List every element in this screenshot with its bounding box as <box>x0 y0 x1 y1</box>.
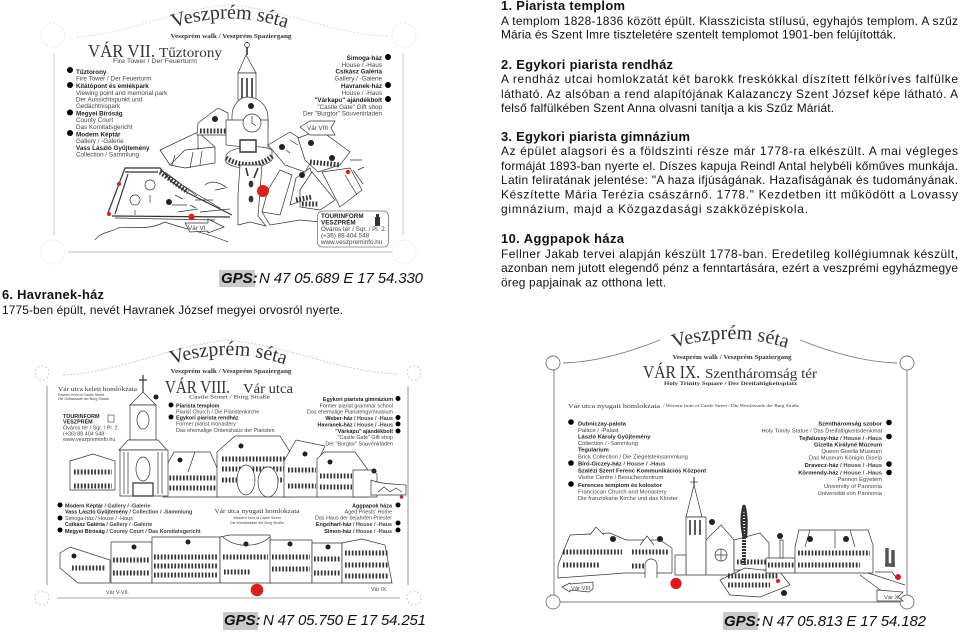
legend left: Visitor Centre / Besucherzentrum <box>578 475 663 481</box>
text block: 3. Egykori piarista gimnázium: Az épület alagsori és a földszinti része már 1778-ra elkészült. A mai végleges <box>501 144 958 158</box>
facade caption west <box>214 509 300 525</box>
GPS label map IX: GPS: <box>724 613 761 630</box>
legend left: County Court <box>76 117 113 124</box>
legend top right: "Castle Gate" Gift shop <box>338 435 393 441</box>
facade caption <box>568 403 799 410</box>
legend right <box>303 54 391 118</box>
facade caption: / Western front of Castle Street / Die Westfassade der Burg Straße <box>663 404 799 408</box>
legend left: Kilátópont és emlékpark <box>76 83 149 90</box>
legend bottom left: Megyei Bíróság / County Court / Das Komitatsgericht <box>65 529 201 535</box>
facade caption west: Die Westfassade der Burg Straße <box>230 521 284 525</box>
map subtitle: Veszprém walk / Veszprém Spaziergang <box>672 355 792 361</box>
text block: 3. Egykori piarista gimnázium <box>501 129 958 216</box>
Tourinform box <box>62 414 119 443</box>
facade caption east: Die Ostfassade der Burg Straße <box>58 397 109 401</box>
illustration: lower street row <box>60 535 392 583</box>
GPS label map IX: N 47 05.813 E 17 54.182 <box>762 613 927 630</box>
facade caption: Vár utca nyugati homlokzata <box>568 403 660 410</box>
legend right: Holy Trinity Statue / Das Dreifaltigkeitsdenkmal <box>762 428 882 434</box>
legend right: Csikász Galéria <box>335 68 382 76</box>
legend right: Gizella Királyné Múzeum <box>814 442 882 448</box>
text block: 10. Aggpapok háza <box>501 231 958 290</box>
legend top centre: Piarist Church / Die Piaristenkirche <box>176 410 259 416</box>
legend top right: Former piarist grammar school <box>320 404 393 410</box>
legend top centre: Former piarist monastery <box>176 422 236 428</box>
illustration: buildings right of tower <box>262 130 364 225</box>
GPS label map VIII: N 47 05.750 E 17 54.251 <box>263 612 426 629</box>
text block: 2. Egykori piarista rendház <box>501 57 958 115</box>
text block: 3. Egykori piarista gimnázium: 3. Egykori piarista gimnázium <box>501 129 690 144</box>
legend top right: Weber-ház / House / -Haus <box>325 416 393 422</box>
Tourinform box: www.veszpreminfo.hu <box>62 437 115 443</box>
text block: 6. Havranek-ház: 6. Havranek-ház <box>2 287 104 302</box>
Tourinform box: Óváros tér / Sqr. / Pl. 2. <box>321 224 387 233</box>
illustration: Holy Trinity statue <box>720 505 790 597</box>
map heading: Vár utca <box>243 381 293 396</box>
legend left <box>67 67 168 158</box>
legend left: Dubniczay-palota <box>578 422 627 428</box>
legend bottom right: Aged Priests' Home <box>345 510 392 516</box>
legend right <box>762 420 892 497</box>
map heading <box>165 376 293 397</box>
legend right: Havranek-ház <box>341 83 382 90</box>
legend right: Tejfalussy-ház / House / -Haus <box>799 436 882 442</box>
legend left: Brick Collection / Die Ziegelsteinsammlung <box>578 454 688 460</box>
map subtitle: Veszprém walk / Veszprém Spaziergang <box>170 34 292 40</box>
map title: Veszprém séta <box>168 341 286 364</box>
legend left: Fire Tower / Der Feuerturm <box>76 76 151 82</box>
illustration: Piarist church <box>119 375 168 496</box>
legend right: House / -Haus <box>342 90 382 97</box>
illustration: castle wall and garden <box>95 108 232 242</box>
map heading translation: Holy Trinity Square / Der Dreifaltigkeitsplatz <box>664 381 798 387</box>
Tourinform box: VESZPRÉM <box>63 418 93 426</box>
map markers <box>72 394 376 558</box>
arrow: Vár VI: Vár VI <box>188 225 206 232</box>
legend top right: Havranek-ház / House / -Haus <box>317 422 393 428</box>
legend right: Queen Gisella Museum <box>821 449 882 455</box>
text block: 1. Piarista templom: Mária és Szent Imre tiszteletére szentelt templomot 1901-ben felújították. <box>501 28 896 42</box>
legend right: Simoga-ház <box>347 55 382 62</box>
legend left: Szalézi Szent Ferenc Kommunikációs Központ <box>578 468 706 474</box>
legend bottom right <box>315 502 400 535</box>
text block: 1. Piarista templom <box>501 0 958 42</box>
legend bottom left <box>58 502 201 535</box>
facade caption west: Western front of Castle Street <box>233 516 281 520</box>
text block: 10. Aggpapok háza: 10. Aggpapok háza <box>501 231 625 246</box>
text block: 2. Egykori piarista rendház: felső falfülkében Szent Anna olvasni tanítja a kis Szűz Máriát. <box>501 101 834 115</box>
legend left: Gedächtnispark <box>76 103 121 110</box>
legend right: "Castle Gate" Gift shop <box>317 104 382 111</box>
map markers <box>166 103 335 205</box>
legend top right: Das ehemalige Piaristengymnasium <box>307 410 393 416</box>
text block: 6. Havranek-ház <box>2 287 343 317</box>
legend bottom right: Simon-ház / House / -Haus <box>324 529 392 535</box>
red location dots <box>251 495 403 596</box>
arrow: Vár VIII <box>300 121 335 135</box>
legend top centre: Egykori piarista rendház <box>176 416 239 422</box>
legend top right: Der "Burgtor" Souvenirladen <box>325 442 393 448</box>
map subtitle: Veszprém walk / Veszprém Spaziergang <box>170 369 292 375</box>
legend bottom right: Das Haus der bejahrten Priester <box>315 516 392 522</box>
legend left: Ferences templom és kolostor <box>578 483 663 489</box>
illustration: fire tower <box>226 42 272 226</box>
map heading <box>643 361 818 382</box>
Tourinform box: TOURINFORM <box>63 414 100 420</box>
legend right: Körmendy-ház / House / -Haus <box>798 470 882 476</box>
legend left: Der Aussichtspunkt und <box>76 96 143 104</box>
legend top right: Egykori piarista gimnázium <box>323 397 393 403</box>
arrow: Vár X: Vár X. <box>884 595 900 601</box>
map title: Veszprém séta <box>670 325 788 348</box>
map heading translation: Castle Street / Burg Straße <box>189 394 271 400</box>
legend right: Szentháromság szobor <box>818 422 883 428</box>
text block: 10. Aggpapok háza: öreg papjainak az otthona lett. <box>501 276 666 290</box>
legend top right: "Várkapu" ajándékbolt <box>335 429 393 435</box>
legend right: Das Museum Königin Gisela <box>809 456 883 462</box>
text block: 6. Havranek-ház: 1775-ben épült, nevét Havranek József megyei orvosról nyerte. <box>2 303 343 317</box>
text block: 3. Egykori piarista gimnázium: formáját 1893-ban nyerte el. Díszes kapuja Reindl Antal helybéli kőműves munkája. <box>501 159 958 173</box>
legend right: "Várkapu" ajándékbolt <box>314 97 383 104</box>
legend left: Franciscan Church and Monastery <box>578 490 667 496</box>
legend left: Das Komitatsgericht <box>76 124 133 131</box>
Tourinform box: (+36) 88 404 548 <box>321 232 370 240</box>
map heading: VÁR VII. <box>88 40 155 61</box>
map frame <box>41 5 416 264</box>
text block: 10. Aggpapok háza: azonban nem jutott elegendő pénz a fenntartására, ezért a veszprémi egyházmegye <box>501 261 958 275</box>
text block: 2. Egykori piarista rendház: 2. Egykori piarista rendház <box>501 57 673 72</box>
legend left: Collection / -Sammlung <box>578 441 638 447</box>
text block: 3. Egykori piarista gimnázium: Készítette Mária Terézia császárnő. 1778." Kezdetben itt működött a Lovassy <box>501 188 958 202</box>
legend bottom right: Engelhart-ház / House / -Haus <box>316 522 392 528</box>
legend bottom left: Vass László Gyűjtemény / Collection / -Sammlung <box>65 510 192 516</box>
street labels <box>106 587 387 596</box>
Tourinform box: Óváros tér / Sqr. / Pl. 2. <box>63 424 119 432</box>
facade caption west: Vár utca nyugati homlokzata <box>214 509 300 515</box>
legend right: Pannon Egyetem <box>838 477 882 483</box>
GPS label map VII: GPS: <box>221 270 258 287</box>
legend bottom left: Modern Képtár / Gallery / -Galerie <box>65 504 150 510</box>
street labels: Vár IX. <box>371 587 387 593</box>
red location dots <box>107 170 350 220</box>
facade caption east: Vár utca keleti homlokzata <box>58 387 137 393</box>
legend left: Tűztorony <box>76 69 107 76</box>
arrow: Vár VIII <box>562 582 593 592</box>
legend left: Tegularium <box>578 448 609 454</box>
legend left <box>568 419 706 502</box>
Tourinform box: VESZPRÉM <box>321 218 356 226</box>
legend left: Vass László Gyűjtemény <box>76 145 150 152</box>
illustration: Franciscan church <box>675 477 769 575</box>
map title: Veszprém séta <box>170 4 288 28</box>
map frame <box>546 340 914 609</box>
legend right: Universität von Pannonia <box>818 491 883 497</box>
legend left: Gallery / -Galerie <box>76 138 124 145</box>
arrow: Vár VI <box>185 219 224 233</box>
red location dots <box>670 574 901 589</box>
legend right: University of Pannonia <box>824 484 883 490</box>
Tourinform box: (+36) 88 404 548 <box>63 432 104 438</box>
street labels: Vár V-VII. <box>106 590 129 596</box>
legend top centre <box>168 402 275 434</box>
legend left: Die franziskane Kirche und das Kloster <box>578 496 678 502</box>
legend right: House / -Haus <box>342 62 382 69</box>
GPS label map VII: N 47 05.689 E 17 54.330 <box>259 270 424 287</box>
legend left: Bíró-Giczey-ház / House / -Haus <box>578 462 665 468</box>
map heading translation: Fire Tower / Der Feuerturm <box>113 58 197 65</box>
legend left: Collection / Sammlung <box>76 152 139 158</box>
legend left: Palace / -Palast <box>578 428 619 434</box>
legend right: Dravecz-ház / House / -Haus <box>805 463 882 469</box>
illustration: statue on right <box>860 548 905 597</box>
illustration: right houses <box>766 530 873 573</box>
legend top centre: Das ehemalige Ordenshaus der Piaristen <box>176 428 275 434</box>
text block: 1. Piarista templom: A templom 1828-1836 között épült. Klasszicista stílusú, egyhajós templom. A szűz <box>501 14 958 28</box>
arrow: Vár VIII: Vár VIII <box>307 125 328 132</box>
Tourinform box <box>318 211 388 247</box>
legend top right <box>307 396 400 448</box>
text block: 3. Egykori piarista gimnázium: gimnázium, majd a Közgazdasági szakközépiskola. <box>501 202 808 216</box>
legend right: Gallery / -Galerie <box>334 76 382 82</box>
legend left: Viewing point and memorial park <box>76 90 168 97</box>
map heading: VÁR IX. <box>643 361 700 382</box>
text block: 2. Egykori piarista rendház: látható. Az alsóban a rend alapítójának Kalazanczy Szent József képe látható. A <box>501 87 958 101</box>
legend bottom right: Aggpapok háza <box>352 504 393 510</box>
illustration: left palaces <box>558 527 672 578</box>
Tourinform box: TOURINFORM <box>321 213 364 220</box>
Tourinform box: www.veszpreminfo.hu <box>320 239 383 246</box>
map frame <box>35 340 421 605</box>
illustration: upper street row <box>70 436 406 497</box>
map heading: Szentháromság tér <box>705 366 818 381</box>
map heading: VÁR VIII. <box>165 376 230 397</box>
panel: map VII Tűztorony <box>40 4 416 264</box>
panel: map IX Szentháromság tér <box>546 325 914 610</box>
panel: map VIII Vár utca <box>34 340 422 606</box>
text block: 3. Egykori piarista gimnázium: Latin feliratának jelentése: "A haza ifjúságának. Hazafiságának és tudományának. <box>501 173 958 187</box>
legend left: Megyei Bíróság <box>76 110 123 118</box>
legend top centre: Piarista templom <box>176 404 220 410</box>
map heading <box>88 40 222 61</box>
legend bottom left: Simoga-ház / House / -Haus <box>65 516 133 522</box>
arrow: Vár VIII: Vár VIII. <box>571 586 592 592</box>
legend left: Modern Képtár <box>76 132 121 138</box>
text block: 10. Aggpapok háza: Fellner Jakab tervei alapján készült 1778-ban. Eredetileg kollégiumnak készült, <box>501 247 958 261</box>
map markers <box>610 519 849 596</box>
facade caption east: Eastern front of Castle Street <box>58 393 104 397</box>
text block: 2. Egykori piarista rendház: A rendház utcai homlokzatát két barokk freskókkal díszített félköríves falfülke <box>501 72 958 86</box>
GPS label map VIII: GPS: <box>224 612 261 629</box>
map heading: Tűztorony <box>159 45 222 60</box>
arrow: Vár X <box>877 590 903 601</box>
legend bottom left: Csikász Galéria / Gallery / -Galerie <box>65 522 152 528</box>
facade caption east <box>58 387 137 401</box>
legend right: Der "Burgtor" Souvenirladen <box>303 110 382 118</box>
legend left: László Károly Gyűjtemény <box>578 434 651 440</box>
